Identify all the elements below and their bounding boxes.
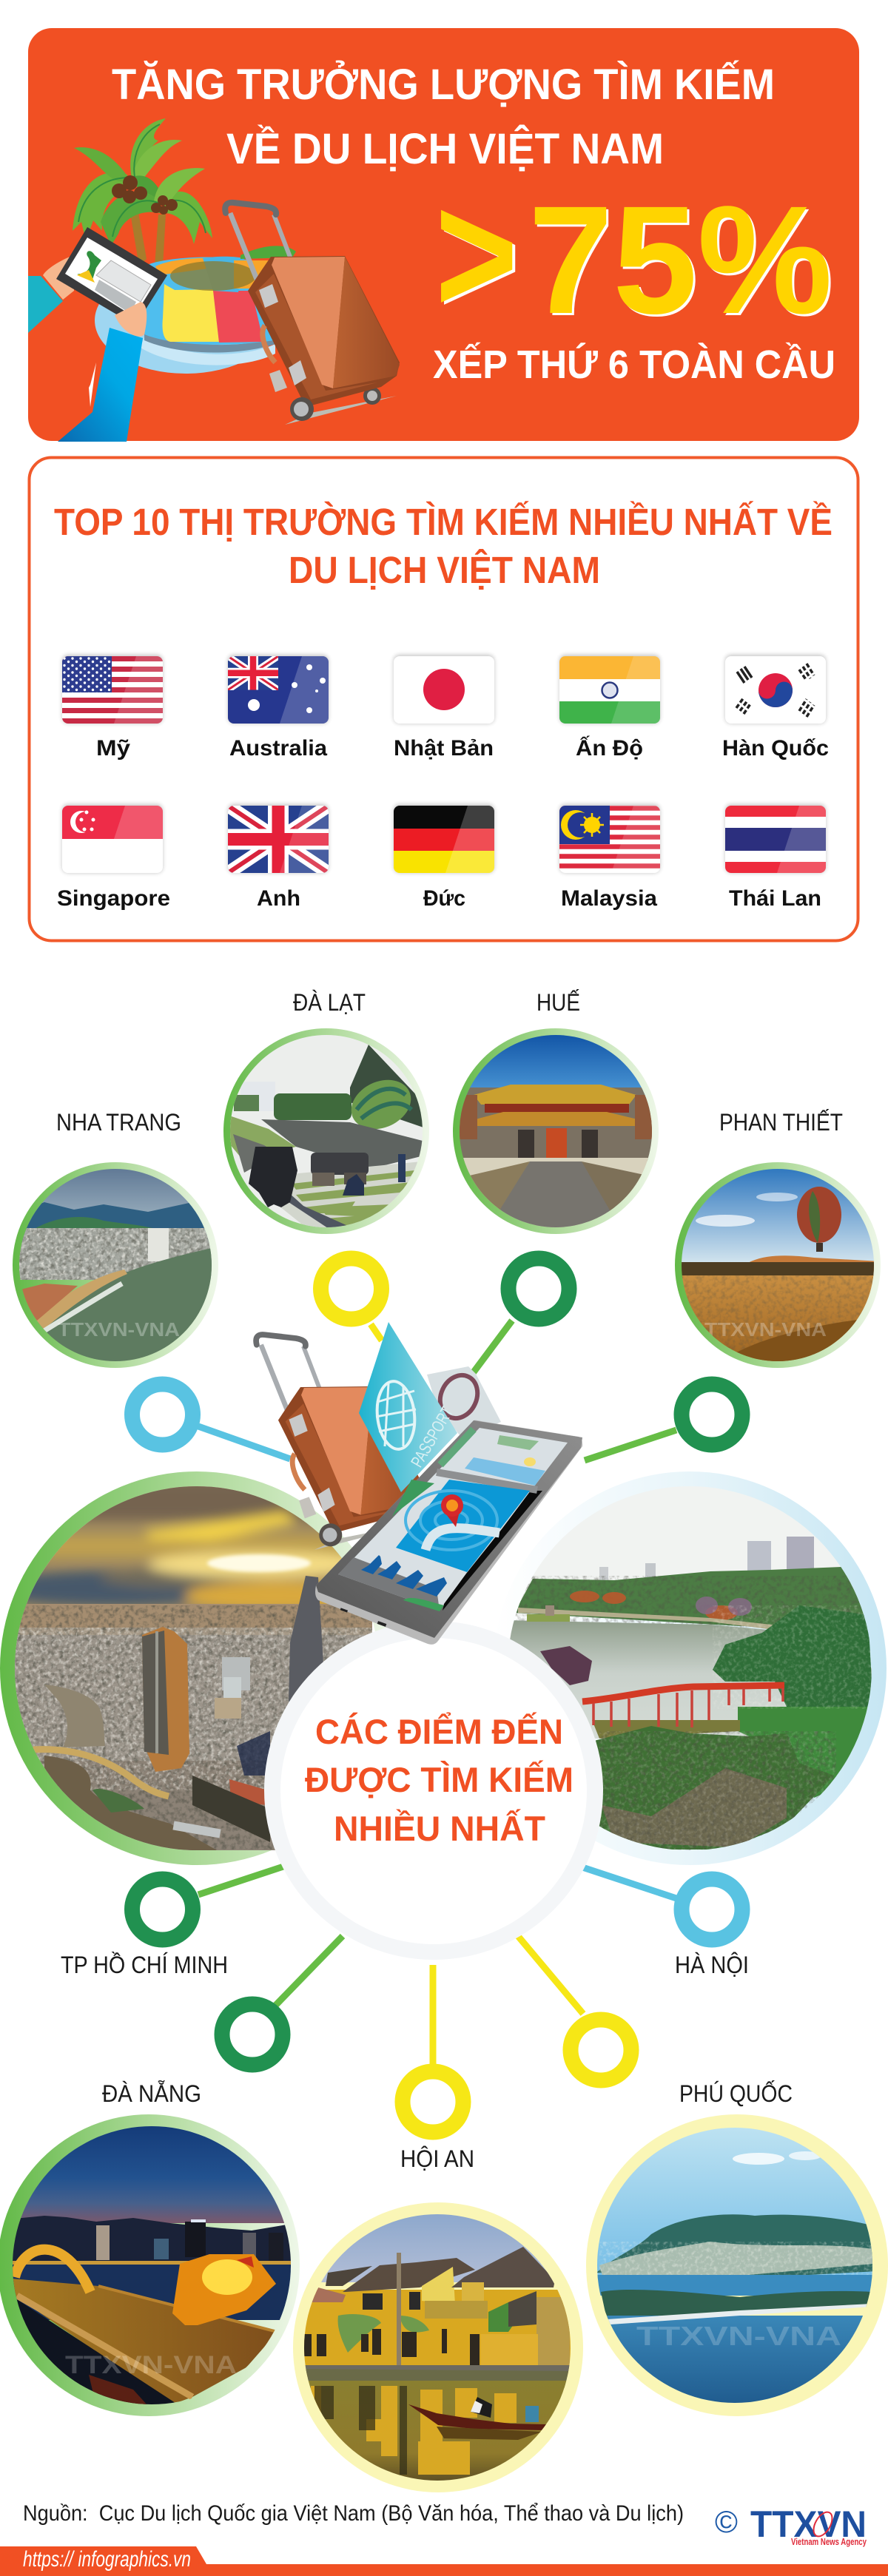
destination: Hà Nội [493,1471,887,1865]
flag: Japan [394,656,494,724]
passport: PASSPORT [407,1403,457,1471]
destination: Đà Nẵng: TTXVN-VNA [65,2351,237,2379]
city labels: PHÚ QUỐC [679,2080,793,2107]
heading: top 10 markets: DU LỊCH VIỆT NAM [289,548,600,591]
flag labels: Hàn Quốc [722,736,829,761]
destination: TP Hồ Chí Minh [0,1471,394,1865]
title: search growth [112,61,775,173]
flag: USA [62,656,163,724]
flag labels: Thái Lan [729,886,821,911]
destination: Phan Thiết [675,1162,884,1376]
header panel [28,28,859,442]
logo: TTXVN: TTXVN [750,2503,867,2545]
illustration: suitcase [225,203,400,425]
destination: Phú Quốc: TTXVN-VNA [636,2321,841,2351]
flag: Singapore [62,806,163,873]
percentage figure [435,158,835,352]
title: search growth: TĂNG TRƯỞNG LƯỢNG TÌM KIẾM [112,61,775,109]
stamped paper [427,1366,501,1439]
center suitcase [256,1335,426,1550]
percentage figure: > [438,161,521,352]
flag labels [57,735,829,911]
destination: Đà Nẵng [0,2114,300,2416]
passport [359,1322,457,1492]
flag: India [559,656,660,724]
illustration: hands and tablet [28,227,167,442]
center heading: CÁC ĐIỂM ĐẾN [315,1712,563,1751]
city labels: TP HỒ CHÍ MINH [61,1952,228,1978]
percentage figure: 75% [531,177,835,348]
destination: Huế [451,1028,666,1239]
city labels: HÀ NỘI [675,1952,749,1978]
city labels [56,989,843,2172]
flag labels: Malaysia [561,886,657,911]
flag labels: Nhật Bản [394,736,494,761]
center circle [264,1621,603,1960]
destination: Nha Trang: TTXVN-VNA [58,1318,180,1341]
city labels: HUẾ [536,989,580,1016]
percentage figure: > [435,158,518,350]
smartphone with map [315,1420,582,1645]
flag: Australia [228,656,329,724]
flag labels: Anh [257,886,300,911]
panel: top 10 markets [30,457,858,941]
flag labels: Ấn Độ [576,735,643,761]
city labels: ĐÀ LẠT [293,989,366,1016]
connector lines [198,1321,676,2066]
center heading [305,1712,574,1848]
footer bar [0,2546,888,2576]
flag: Thailand [725,806,826,873]
destination: Phú Quốc [586,2114,888,2416]
city labels: ĐÀ NẴNG [102,2080,201,2107]
destination: Đà Lạt [222,1028,437,1235]
connector rings [132,1258,742,2132]
illustration: swim ring [95,257,278,374]
illustration: palm trees [73,118,212,266]
percentage figure: 75% [528,175,832,346]
flag labels: Mỹ [96,736,130,761]
center heading: ĐƯỢC TÌM KIẾM [305,1760,574,1799]
city labels: NHA TRANG [56,1109,181,1136]
flag: Malaysia [559,806,660,873]
source line: Nguồn: Cục Du lịch Quốc gia Việt Nam (Bộ Văn hóa, Thể thao và Du lịch) [23,2501,684,2526]
destination: Phan Thiết: TTXVN-VNA [704,1318,827,1341]
footer bar: https:// infographics.vn [23,2547,191,2572]
city labels: HỘI AN [400,2145,474,2172]
flag labels: Singapore [57,886,170,911]
city labels: PHAN THIẾT [719,1109,843,1136]
flag: Germany [394,806,494,873]
logo: TTXVN: © [715,2504,738,2539]
flag labels: Australia [229,736,327,761]
center heading: NHIỀU NHẤT [334,1809,545,1848]
flag: South Korea [725,656,826,724]
title: search growth: VỀ DU LỊCH VIỆT NAM [226,125,664,173]
heading: top 10 markets [54,500,832,591]
rank subtitle: XẾP THỨ 6 TOÀN CẦU [433,343,835,387]
flag labels: Đức [423,886,465,911]
flag: UK [228,806,329,873]
flag shadows [62,655,826,873]
destination: Nha Trang [13,1162,222,1369]
destination: Hội An [293,2202,583,2492]
